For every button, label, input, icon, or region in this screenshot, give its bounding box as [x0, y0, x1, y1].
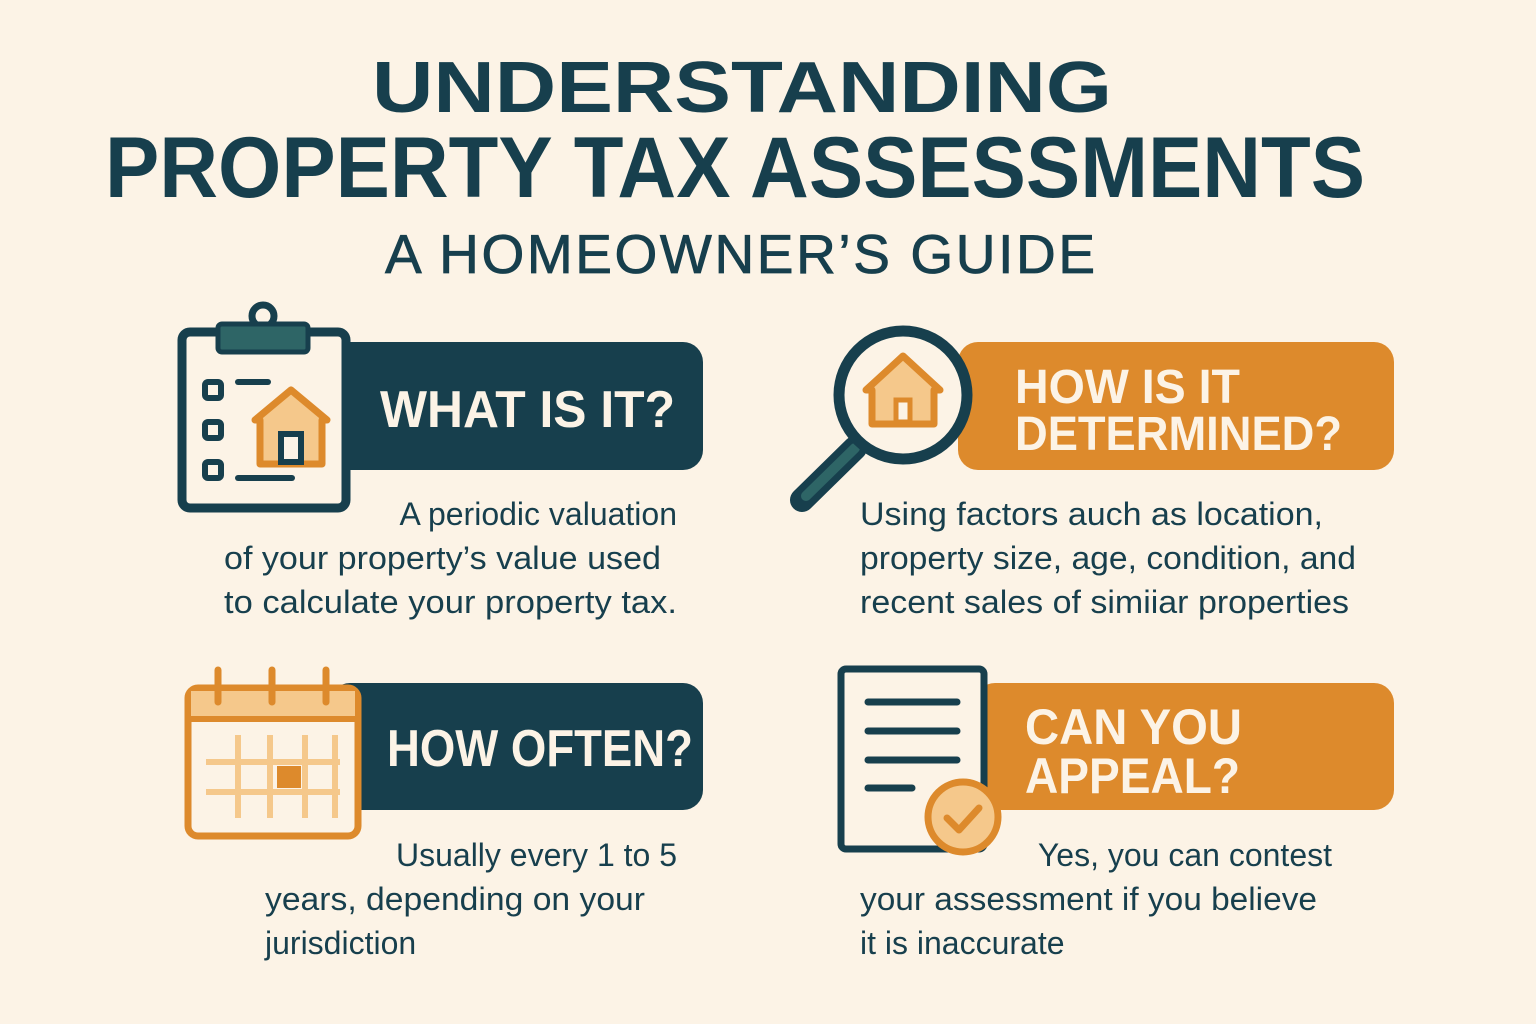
text: what is it — [224, 496, 677, 620]
heading bar: how often — [330, 683, 703, 810]
text: how often — [264, 837, 677, 961]
text: appeal: Yes, you can contest — [1038, 837, 1332, 873]
icon: document with check — [841, 669, 998, 852]
text: what is it: A periodic valuation — [399, 496, 677, 532]
text: how often: years, depending on your — [265, 881, 645, 917]
text: how determined: Using factors auch as location, — [860, 496, 1323, 532]
heading bar: appeal: CAN YOU — [1025, 699, 1242, 755]
heading bar: how often: HOW OFTEN? — [387, 720, 693, 778]
heading bar: appeal: APPEAL? — [1025, 748, 1240, 804]
text: how determined: property size, age, condition, and — [860, 540, 1356, 576]
text: what is it: to calculate your property tax. — [224, 584, 677, 620]
heading bar: how determined: HOW IS IT — [1015, 361, 1240, 414]
heading bar: what is it — [320, 342, 703, 470]
title — [105, 48, 1365, 216]
heading bar: what is it: WHAT IS IT? — [380, 381, 675, 439]
icon: calendar — [188, 670, 358, 836]
text: how often: Usually every 1 to 5 — [396, 837, 677, 873]
text: appeal — [860, 837, 1332, 961]
title: PROPERTY TAX ASSESSMENTS — [105, 120, 1365, 216]
text: appeal: it is inaccurate — [860, 925, 1065, 961]
title: UNDERSTANDING — [372, 48, 1112, 128]
panel: how is it determined — [802, 331, 1394, 620]
heading bar: how determined — [958, 342, 1394, 470]
text: how determined — [860, 496, 1356, 620]
heading bar: how determined: DETERMINED? — [1015, 408, 1342, 461]
text: how determined: recent sales of simiiar properties — [860, 584, 1349, 620]
heading bar: appeal — [975, 683, 1394, 810]
text: how often: jurisdiction — [264, 925, 416, 961]
panel: can you appeal — [841, 669, 1394, 961]
icon: magnifier with house — [802, 331, 967, 500]
text: appeal: your assessment if you believe — [860, 881, 1317, 917]
panel: what is it — [182, 305, 703, 620]
panel: how often — [188, 670, 703, 961]
subtitle: A HOMEOWNER’S GUIDE — [385, 223, 1095, 285]
text: what is it: of your property’s value used — [224, 540, 661, 576]
icon: clipboard with house — [182, 305, 346, 508]
